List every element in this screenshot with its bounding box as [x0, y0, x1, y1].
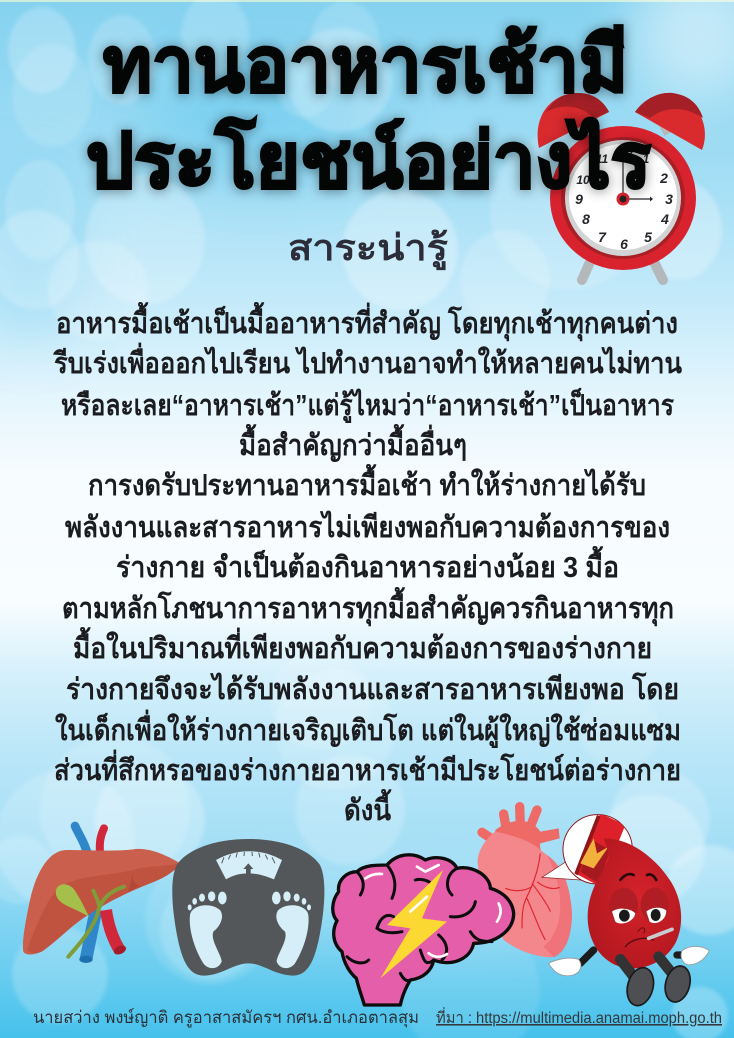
- icon: alarm clock: 7: [598, 229, 607, 245]
- body text: พลังงานและสารอาหารไม่เพียงพอกับความต้องการของ: [65, 510, 670, 544]
- icon: alarm clock: 9: [575, 191, 583, 207]
- title: ทานอาหารเช้ามี: [103, 24, 628, 108]
- body text: การงดรับประทานอาหารมื้อเช้า ทำให้ร่างกายได้รับ: [88, 463, 646, 502]
- icon: alarm clock: 4: [660, 211, 669, 227]
- title: [86, 24, 651, 204]
- title: ประโยชน์อย่างไร: [86, 116, 651, 204]
- body text: ดังนี้: [344, 788, 392, 827]
- icon: alarm clock: 1: [643, 152, 650, 166]
- body text: มื้อสำคัญกว่ามื้ออื่นๆ: [239, 423, 467, 463]
- icon: bathroom scale: [172, 839, 324, 976]
- icon: alarm clock: 6: [620, 236, 628, 252]
- subtitle: สาระน่ารู้: [288, 227, 449, 271]
- icon: alarm clock: 2: [659, 170, 668, 186]
- icon: alarm clock: 5: [644, 229, 652, 245]
- icon: liver: [23, 826, 180, 963]
- icon: sad blood drop character: [542, 813, 709, 1009]
- icon: brain with lightning bolt: [333, 855, 514, 1005]
- icon: heart: [478, 807, 572, 957]
- body text: ร่างกาย จำเป็นต้องกินอาหารอย่างน้อย 3 มื้อ: [116, 545, 619, 584]
- body text: ร่างกายจึงจะได้รับพลังงานและสารอาหารเพียงพอ โดย: [66, 671, 679, 706]
- icon: alarm clock: 3: [665, 191, 673, 207]
- body text: มื้อในปริมาณที่เพียงพอกับความต้องการของร่างกาย: [73, 626, 652, 665]
- footer: source: ที่มา : https://multimedia.anamai.moph.go.th: [436, 1007, 722, 1027]
- footer: author credit: นายสว่าง พงษ์ญาติ ครูอาสาสมัครฯ กศน.อำเภอตาลสุม: [33, 1008, 419, 1028]
- icon: alarm clock: [538, 93, 705, 280]
- icon: alarm clock: 10: [576, 173, 590, 187]
- body text: [53, 301, 682, 827]
- icon: alarm clock: 8: [582, 211, 590, 227]
- icon: alarm clock: 12: [619, 147, 633, 161]
- icon: alarm clock: 11: [596, 152, 609, 166]
